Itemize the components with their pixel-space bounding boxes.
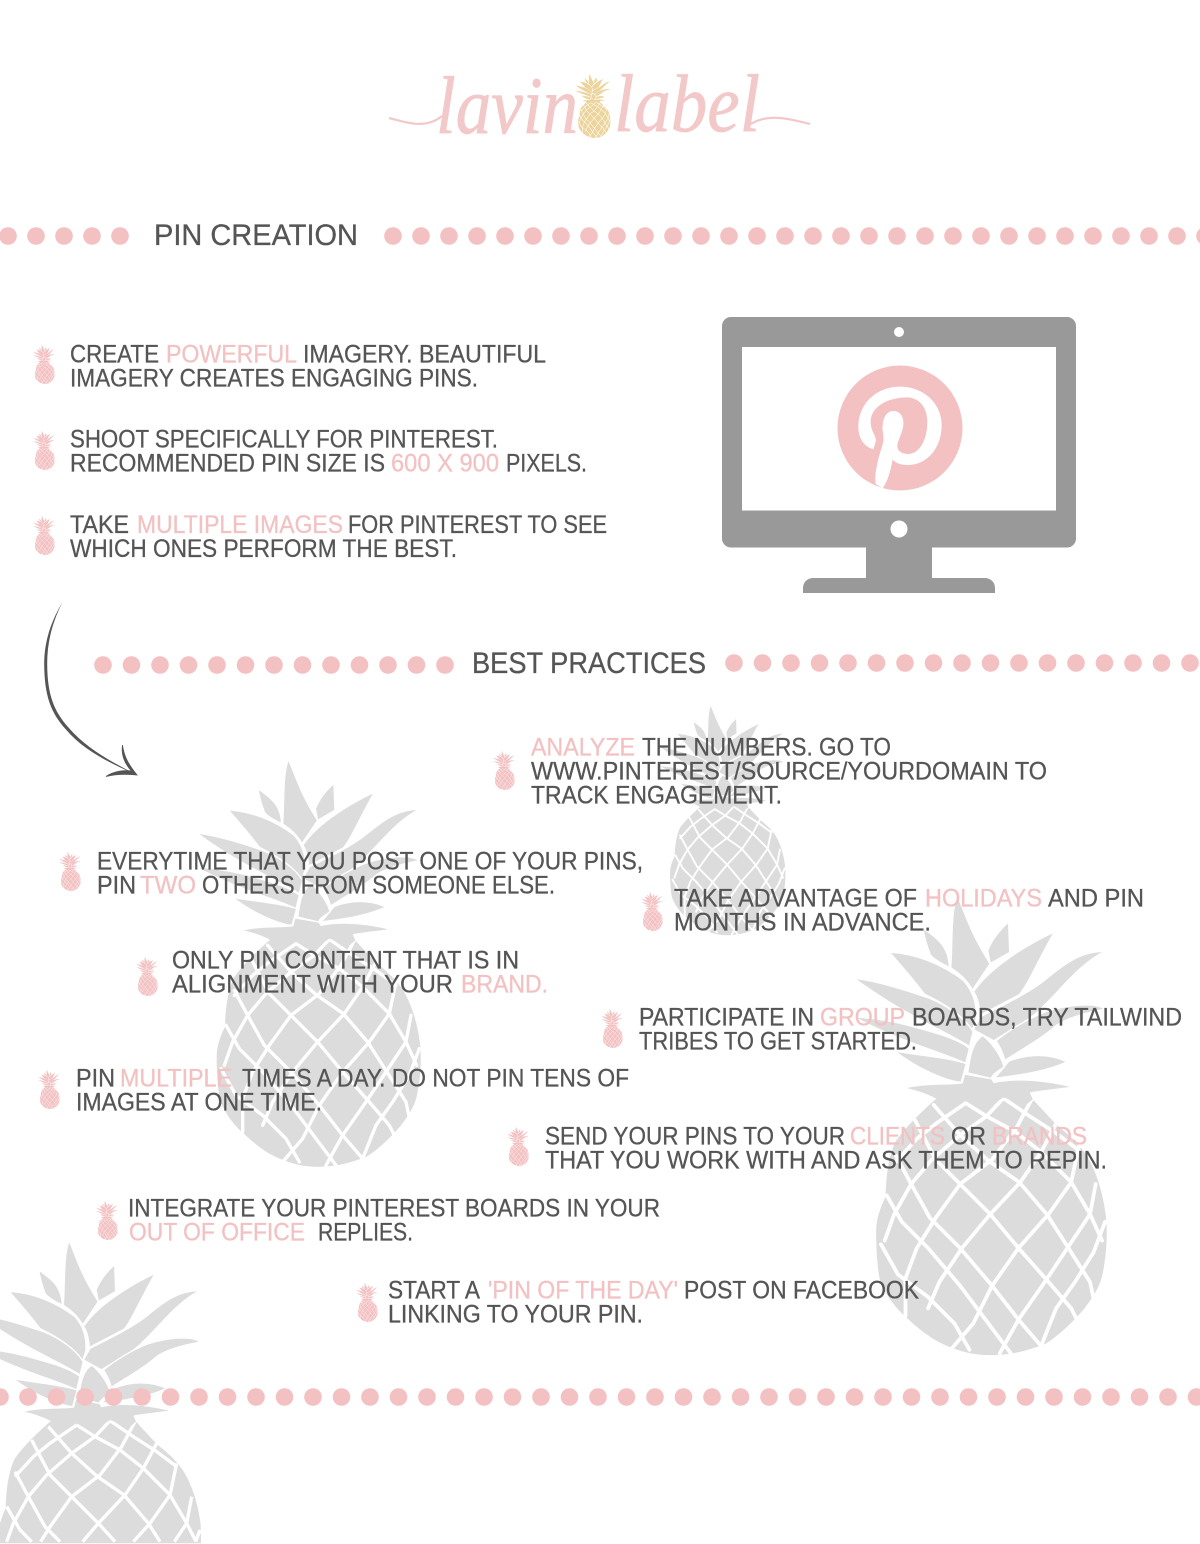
practice: pin two others: TWO [140,871,196,899]
practice: pin multiple times [38,1064,629,1116]
practice: out of office: INTEGRATE YOUR PINTEREST BOARDS IN YOUR [128,1194,660,1222]
dotted rule: best practices left [94,656,454,674]
practice: brand alignment: ONLY PIN CONTENT THAT IS IN [172,946,519,974]
tip: powerful imagery: IMAGERY CREATES ENGAGING PINS. [70,364,478,392]
heading: best practices: BEST PRACTICES [472,647,706,680]
practice: group boards: GROUP [820,1003,905,1031]
practice: analyze the numbers: THE NUMBERS. GO TO [642,733,891,761]
background pineapple: upper centre [659,705,785,935]
dotted rule: pin creation [0,227,1200,245]
practice: clients and brands [507,1122,1107,1174]
background pineapple: upper left [197,759,421,1167]
tip: shoot for pinterest: PIXELS. [506,449,587,477]
practice: clients and brands: THAT YOU WORK WITH AND ASK THEM TO REPIN. [545,1146,1107,1174]
practice: clients and brands: SEND YOUR PINS TO YOUR [545,1122,845,1150]
practice: pin two others: EVERYTIME THAT YOU POST ONE OF YOUR PINS, [97,847,643,875]
practice: clients and brands: BRANDS [992,1122,1087,1150]
practice: pin multiple times: MULTIPLE [120,1064,232,1092]
practice: out of office [96,1194,660,1246]
practice: pin of the day: LINKING TO YOUR PIN. [388,1300,643,1328]
tip: powerful imagery: POWERFUL [166,340,297,368]
background pineapple: right [854,895,1107,1355]
icon: monitor with pinterest logo [722,317,1076,593]
tip: powerful imagery [33,340,546,392]
practice: out of office: REPLIES. [318,1218,413,1246]
dotted rule: best practices right [725,654,1199,672]
practice: group boards: TRIBES TO GET STARTED. [639,1027,917,1055]
tip: shoot for pinterest: 600 X 900 [391,449,499,477]
background pineapple: bottom left [0,1241,201,1543]
practice: pin multiple times: PIN [76,1064,115,1092]
practice: group boards: PARTICIPATE IN [639,1003,814,1031]
tip: powerful imagery: CREATE [70,340,159,368]
dotted rule: footer [0,1388,1200,1406]
practice: analyze the numbers: TRACK ENGAGEMENT. [531,781,782,809]
practice: group boards [601,1003,1182,1055]
practice: holidays: HOLIDAYS [925,884,1042,912]
practice: pin of the day: 'PIN OF THE DAY' [488,1276,678,1304]
tip: shoot for pinterest: RECOMMENDED PIN SIZE IS [70,449,385,477]
practice: analyze the numbers: ANALYZE [531,733,635,761]
practice: clients and brands: OR [951,1122,986,1150]
practice: out of office: OUT OF OFFICE [129,1218,305,1246]
tip: multiple images: TAKE [70,511,129,539]
practice: analyze the numbers: WWW.PINTEREST/SOURCE/YOURDOMAIN TO [531,757,1047,785]
practice: pin of the day [356,1276,919,1328]
tip: shoot for pinterest: SHOOT SPECIFICALLY FOR PINTEREST. [70,425,498,453]
logo: lavin [436,60,578,151]
practice: holidays: MONTHS IN ADVANCE. [674,908,931,936]
practice: pin multiple times: TIMES A DAY. DO NOT PIN TENS OF [242,1064,629,1092]
tip: powerful imagery: IMAGERY. BEAUTIFUL [303,340,546,368]
arrow: curved pointer [44,602,137,776]
practice: holidays [641,884,1144,936]
practice: pin of the day: START A [388,1276,480,1304]
heading: pin creation: PIN CREATION [154,219,358,252]
practice: holidays: AND PIN [1048,884,1144,912]
practice: brand alignment [136,946,548,998]
practice: clients and brands: CLIENTS [850,1122,945,1150]
logo: label [614,58,760,149]
practice: pin two others: PIN [97,871,136,899]
tip: multiple images: MULTIPLE IMAGES [137,511,343,539]
practice: pin two others: OTHERS FROM SOMEONE ELSE. [202,871,555,899]
practice: analyze the numbers [493,733,1047,809]
practice: brand alignment: ALIGNMENT WITH YOUR [172,970,453,998]
practice: pin of the day: POST ON FACEBOOK [684,1276,919,1304]
practice: pin two others [59,847,643,899]
practice: brand alignment: BRAND. [461,970,548,998]
tip: multiple images: WHICH ONES PERFORM THE BEST. [70,535,457,563]
tip: shoot for pinterest [33,425,587,477]
practice: holidays: TAKE ADVANTAGE OF [674,884,917,912]
logo [389,58,810,151]
tip: multiple images: FOR PINTEREST TO SEE [348,511,607,539]
tip: multiple images [33,511,607,563]
practice: pin multiple times: IMAGES AT ONE TIME. [76,1088,322,1116]
practice: group boards: BOARDS, TRY TAILWIND [912,1003,1182,1031]
